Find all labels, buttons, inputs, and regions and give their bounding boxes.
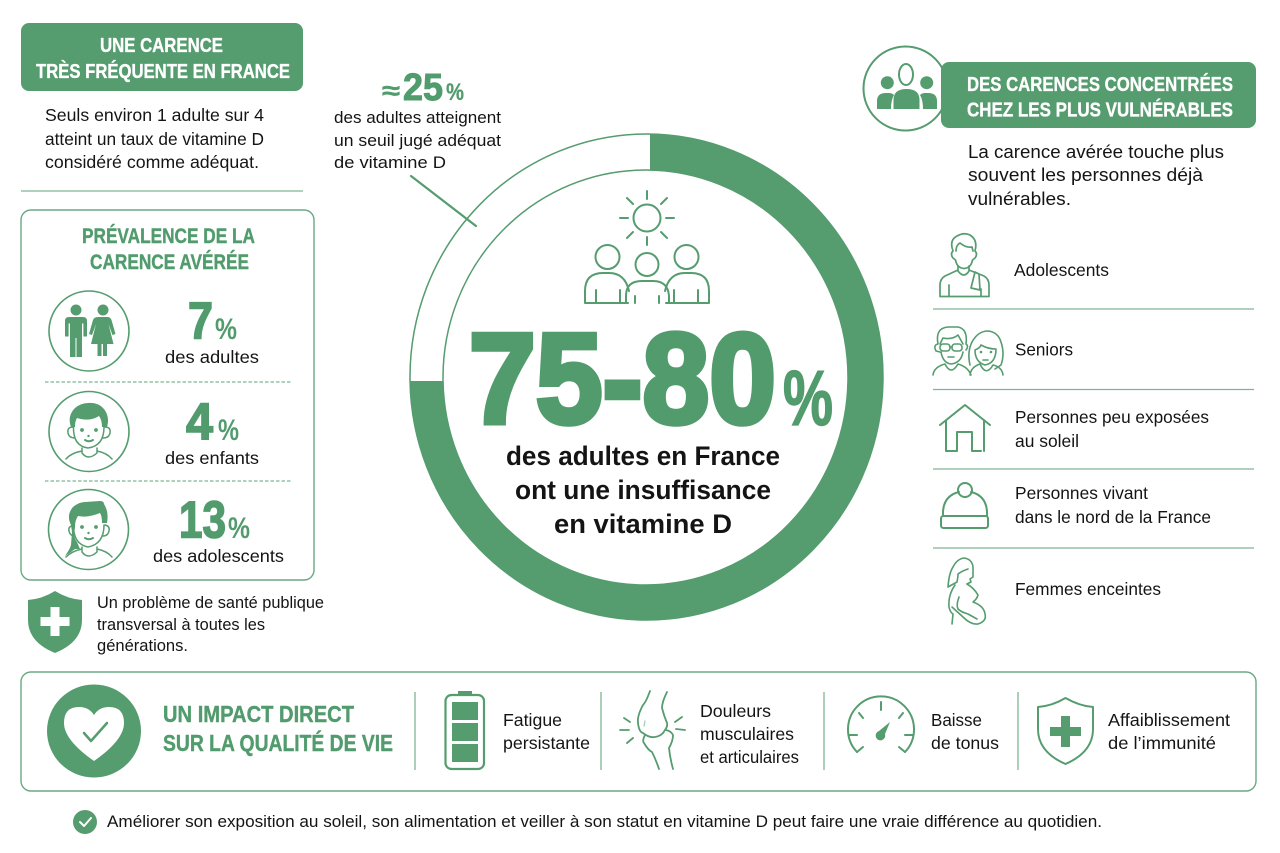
label: affaiblissement: de l’immunité: [1108, 733, 1216, 753]
callout: environ 25 %: des adultes atteignent: [334, 108, 501, 127]
icon: groupe de personnes: [585, 245, 709, 303]
label: douleurs: [700, 701, 799, 767]
stat: adultes: [165, 292, 259, 367]
icon: coeur: [47, 684, 141, 778]
icon: seniors: [933, 327, 1003, 375]
heading banner: CHEZ LES PLUS VULNÉRABLES: [967, 98, 1233, 122]
panel heading: PRÉVALENCE DE LA: [82, 225, 255, 248]
label: douleurs: musculaires: [700, 724, 794, 744]
intro text: La carence avérée touche plus: [968, 142, 1224, 162]
panel: impact sur la qualité de vie: [21, 672, 1256, 791]
label: baisse de tonus: Baisse: [931, 710, 982, 730]
label: seniors: Seniors: [1015, 340, 1073, 360]
icon: enfant: [49, 392, 129, 472]
callout: environ 25 %: un seuil jugé adéquat: [334, 131, 501, 150]
label: personnes vivant dans le nord: dans le nord de la France: [1015, 507, 1211, 527]
headline figure: 75-80: [469, 308, 776, 451]
stat: adultes: des adultes: [165, 347, 259, 367]
stat: adolescents: 13: [179, 492, 226, 550]
headline figure: %: [783, 354, 833, 442]
heading banner: TRÈS FRÉQUENTE EN FRANCE: [36, 60, 290, 83]
callout: environ 25 %: 25: [403, 67, 443, 109]
icon: bonnet: [941, 483, 988, 528]
label: baisse de tonus: [931, 710, 999, 753]
label: personnes vivant dans le nord: Personnes vivant: [1015, 483, 1148, 503]
footer message: Améliorer son exposition au soleil, son alimentation et veiller à son statut en vitamine D peut faire une vraie différence au quotidien.: [107, 812, 1102, 831]
intro text: vulnérables.: [968, 189, 1071, 209]
label: affaiblissement: Affaiblissement: [1108, 710, 1230, 730]
callout: environ 25 %: %: [446, 79, 464, 106]
panel: carence très fréquente: [21, 23, 303, 191]
panel: prévalence de la carence avérée: [21, 210, 314, 580]
icon: coche: [73, 810, 97, 834]
stat: adolescents: [153, 492, 284, 566]
intro text: [968, 142, 1224, 209]
stat: enfants: [165, 394, 259, 468]
heading banner: [21, 23, 303, 91]
label: personnes peu exposées: au soleil: [1015, 431, 1079, 451]
heading banner: DES CARENCES CONCENTRÉES: [967, 73, 1233, 96]
section heading: SUR LA QUALITÉ DE VIE: [163, 729, 393, 756]
icon: bouclier santé publique: [28, 591, 82, 653]
label: femmes enceintes: Femmes enceintes: [1015, 579, 1161, 599]
note: santé publique: [97, 594, 324, 655]
intro text: atteint un taux de vitamine D: [45, 129, 264, 149]
label: adolescents: Adolescents: [1014, 260, 1109, 280]
stat: adolescents: des adolescents: [153, 546, 284, 566]
heading banner: [941, 62, 1256, 128]
note: santé publique: Un problème de santé publique: [97, 594, 324, 612]
intro text: souvent les personnes déjà: [968, 165, 1204, 185]
icon: groupe: [864, 46, 948, 130]
callout: environ 25 %: ≈: [382, 77, 400, 105]
panel: carences chez les plus vulnérables: [864, 46, 1256, 624]
stat: adultes: %: [215, 313, 237, 346]
icon: femme enceinte: [948, 558, 985, 624]
icon: adultes: [49, 291, 129, 371]
stat: adolescents: %: [228, 512, 250, 545]
icon: maison: [940, 405, 990, 451]
callout: environ 25 %: [334, 67, 501, 172]
label: personnes peu exposées: Personnes peu exposées: [1015, 407, 1209, 427]
label: fatigue: [503, 710, 590, 753]
headline text: [506, 441, 780, 539]
intro text: [45, 105, 264, 172]
section heading: UN IMPACT DIRECT: [163, 701, 354, 727]
icon: adolescent: [48, 490, 128, 570]
icon: batterie: [446, 691, 484, 769]
stat: enfants: des enfants: [165, 448, 259, 468]
panel heading: [82, 225, 255, 274]
callout: environ 25 %: de vitamine D: [334, 153, 446, 172]
note: santé publique: générations.: [97, 637, 188, 655]
label: personnes peu exposées: [1015, 407, 1209, 451]
intro text: considéré comme adéquat.: [45, 152, 259, 172]
label: fatigue: persistante: [503, 733, 590, 753]
label: affaiblissement: [1108, 710, 1230, 753]
heading banner: UNE CARENCE: [100, 35, 223, 57]
stat: adultes: 7: [188, 292, 213, 350]
icon: jauge: [848, 696, 914, 752]
icon: soleil: [620, 191, 674, 245]
leader line: [411, 176, 476, 226]
label: douleurs: Douleurs: [700, 701, 771, 721]
headline text: des adultes en France: [506, 441, 780, 471]
chart: anneau 75-80 %: [410, 134, 883, 620]
headline text: en vitamine D: [554, 509, 732, 539]
icon: adolescents: [940, 234, 989, 296]
stat: enfants: 4: [186, 394, 213, 452]
label: personnes vivant dans le nord: [1015, 483, 1211, 527]
panel heading: CARENCE AVÉRÉE: [90, 251, 249, 274]
note: santé publique: transversal à toutes les: [97, 616, 265, 634]
label: fatigue: Fatigue: [503, 710, 562, 730]
intro text: Seuls environ 1 adulte sur 4: [45, 105, 264, 125]
stat: enfants: %: [218, 414, 239, 447]
icon: articulation: [620, 691, 685, 769]
icon: bouclier immunité: [1038, 698, 1093, 764]
label: douleurs: et articulaires: [700, 747, 799, 767]
headline text: ont une insuffisance: [515, 475, 771, 505]
section heading: [163, 701, 393, 756]
label: baisse de tonus: de tonus: [931, 733, 999, 753]
